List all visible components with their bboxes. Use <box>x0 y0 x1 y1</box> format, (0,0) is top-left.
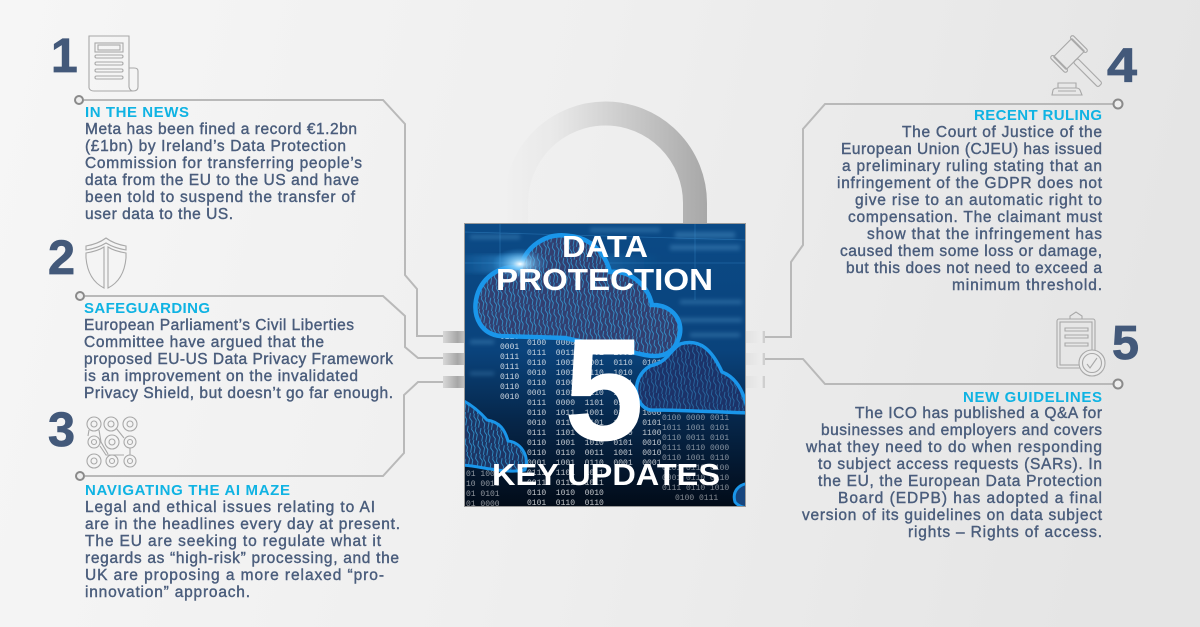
heading: RECENT RULING <box>974 107 1102 124</box>
cloud corner <box>732 482 745 506</box>
heading: SAFEGUARDING <box>84 300 210 317</box>
number 1: 1 <box>51 30 78 83</box>
big number 5: 5 <box>564 308 644 471</box>
body text: European Union (CJEU) has issued <box>841 141 1102 158</box>
heading: IN THE NEWS <box>85 104 189 121</box>
body text: been told to suspend the transfer of <box>85 189 356 206</box>
binary rain: 0111 <box>500 353 519 362</box>
body text: Board (EDPB) has adopted a final <box>838 490 1102 507</box>
binary rain: 0111 1101 1011 <box>527 469 604 478</box>
binary rain: 0010 <box>500 393 519 402</box>
binary rain: 0011 0111 1011 <box>527 479 604 488</box>
binary rain: 0111 1101 0110 0110 1100 <box>527 429 662 438</box>
binary rain: 0110 <box>500 333 519 342</box>
binary rain: 1011 1001 0101 <box>662 424 729 433</box>
body text: is an improvement on the invalidated <box>84 368 358 385</box>
padlock subtitle: key updates: KEY UPDATES <box>492 457 720 492</box>
binary rain: 01 1001 <box>466 470 500 479</box>
binary rain: 0001 <box>500 343 519 352</box>
icon: clipboard with check <box>1057 312 1105 376</box>
binary rain: 0001 0110 0110 <box>662 474 729 483</box>
binary rain: 0110 1001 0110 <box>662 454 729 463</box>
binary rain: 0101 0110 0100 <box>662 464 729 473</box>
body text <box>837 124 1103 294</box>
padlock title: data protection <box>496 229 713 297</box>
body text: give rise to an automatic right to <box>855 192 1102 209</box>
binary rain: 10 0011 <box>466 480 500 489</box>
light flare <box>496 249 546 279</box>
connector lines <box>75 96 1122 480</box>
body text: compensation. The claimant must <box>848 209 1103 226</box>
binary rain: 0110 1010 0010 <box>527 489 604 498</box>
body text: what they need to do when responding <box>805 439 1102 456</box>
panel 3: navigating the AI maze <box>48 404 400 601</box>
binary rain: 0110 0100 1011 0101 1000 <box>527 379 662 388</box>
body text: Privacy Shield, but doesn’t go far enough. <box>84 385 393 402</box>
binary rain: 0100 0000 1011 0101 1010 <box>527 339 662 348</box>
binary rain: 0110 1001 1001 0110 0101 <box>527 359 662 368</box>
binary rain: 0010 0110 0101 1110 0101 <box>527 419 662 428</box>
body text <box>85 121 362 223</box>
body text: the EU, the European Data Protection <box>818 473 1102 490</box>
body text: innovation” approach. <box>85 584 250 601</box>
binary rain: 0110 0110 0011 1001 0010 <box>527 449 662 458</box>
binary rain: 0110 0011 0101 <box>662 434 729 443</box>
body text: are in the headlines every day at present. <box>85 516 400 533</box>
number 5: 5 <box>1112 317 1139 370</box>
number 2: 2 <box>48 232 75 285</box>
body text: but this does not need to exceed a <box>846 260 1102 277</box>
body text <box>802 405 1103 541</box>
body text: rights – Rights of access. <box>908 524 1102 541</box>
heading: NEW GUIDELINES <box>963 389 1102 406</box>
body text: The EU are seeking to regulate what it <box>85 533 382 550</box>
icon: circuit nodes <box>87 417 137 468</box>
panel 4: recent ruling <box>837 35 1137 294</box>
icon: gavel <box>1050 35 1111 96</box>
padlock body: cloud data image <box>462 223 750 509</box>
body text: proposed EU-US Data Privacy Framework <box>84 351 393 368</box>
padlock title: data protection: DATA <box>562 229 648 264</box>
cloud right <box>636 342 748 413</box>
binary rain: 0110 1001 1010 0101 0010 <box>527 439 662 448</box>
body text: Committee have argued that the <box>84 334 324 351</box>
binary rain: 01 0101 <box>466 490 500 499</box>
body text: user data to the US. <box>85 206 233 223</box>
binary rain: 0111 0110 1010 <box>662 484 729 493</box>
binary rain: 0111 0110 0000 <box>662 444 729 453</box>
cloud lower left <box>462 400 526 471</box>
body text: infringement of the GDPR does not <box>837 175 1103 192</box>
body text: (£1bn) by Ireland’s Data Protection <box>85 138 346 155</box>
number 4: 4 <box>1107 40 1137 93</box>
body text: Meta has been fined a record €1.2bn <box>85 121 357 138</box>
body text: show that the infringement has <box>867 226 1102 243</box>
binary rain: 0110 <box>500 373 519 382</box>
binary rain <box>466 333 729 509</box>
binary rain: 0100 0000 0011 <box>662 414 729 423</box>
body text: businesses and employers and covers <box>821 422 1102 439</box>
padlock side pins <box>443 331 765 388</box>
binary rain: 0111 0000 1101 0111 1000 <box>527 399 662 408</box>
binary rain: 0010 1001 0110 1010 0001 <box>527 369 662 378</box>
body text <box>85 499 400 601</box>
body text <box>84 317 393 402</box>
body text: caused them some loss or damage, <box>840 243 1102 260</box>
icon: newspaper <box>89 36 138 91</box>
body text: to subject access requests (SARs). In <box>818 456 1102 473</box>
binary rain: 01 0000 <box>466 500 500 509</box>
icon: shield <box>86 238 126 288</box>
padlock title: data protection: PROTECTION <box>496 262 713 297</box>
binary rain: 0100 0111 <box>675 494 718 503</box>
binary rain: 0110 1011 1001 0101 1000 <box>527 409 662 418</box>
binary rain: 0110 <box>500 383 519 392</box>
body text: regards as “high-risk” processing, and the <box>85 550 399 567</box>
number 3: 3 <box>48 404 75 457</box>
body text: Commission for transferring people’s <box>85 155 362 172</box>
body text: UK are proposing a more relaxed “pro- <box>85 567 384 584</box>
heading: NAVIGATING THE AI MAZE <box>85 482 290 499</box>
binary rain: 0111 0011 0001 1001 0110 <box>527 349 662 358</box>
binary rain: 0101 0110 0110 <box>527 499 604 508</box>
body text: minimum threshold. <box>952 277 1102 294</box>
padlock shackle <box>516 113 695 224</box>
panel 5: new guidelines <box>802 312 1139 541</box>
body text: The Court of Justice of the <box>902 124 1102 141</box>
binary rain: 0001 0101 0110 1010 0011 <box>527 389 662 398</box>
panel 1: in the news <box>51 30 362 223</box>
body text: European Parliament’s Civil Liberties <box>84 317 354 334</box>
panel 2: safeguarding <box>48 232 393 402</box>
cloud large <box>475 235 680 356</box>
body text: data from the EU to the US and have <box>85 172 359 189</box>
body text: Legal and ethical issues relating to AI <box>85 499 375 516</box>
binary rain: 0001 1001 0110 0001 0001 <box>527 459 662 468</box>
body text: The ICO has published a Q&A for <box>855 405 1102 422</box>
body text: version of its guidelines on data subject <box>802 507 1103 524</box>
body text: a preliminary ruling stating that an <box>842 158 1102 175</box>
binary rain: 0111 <box>500 363 519 372</box>
